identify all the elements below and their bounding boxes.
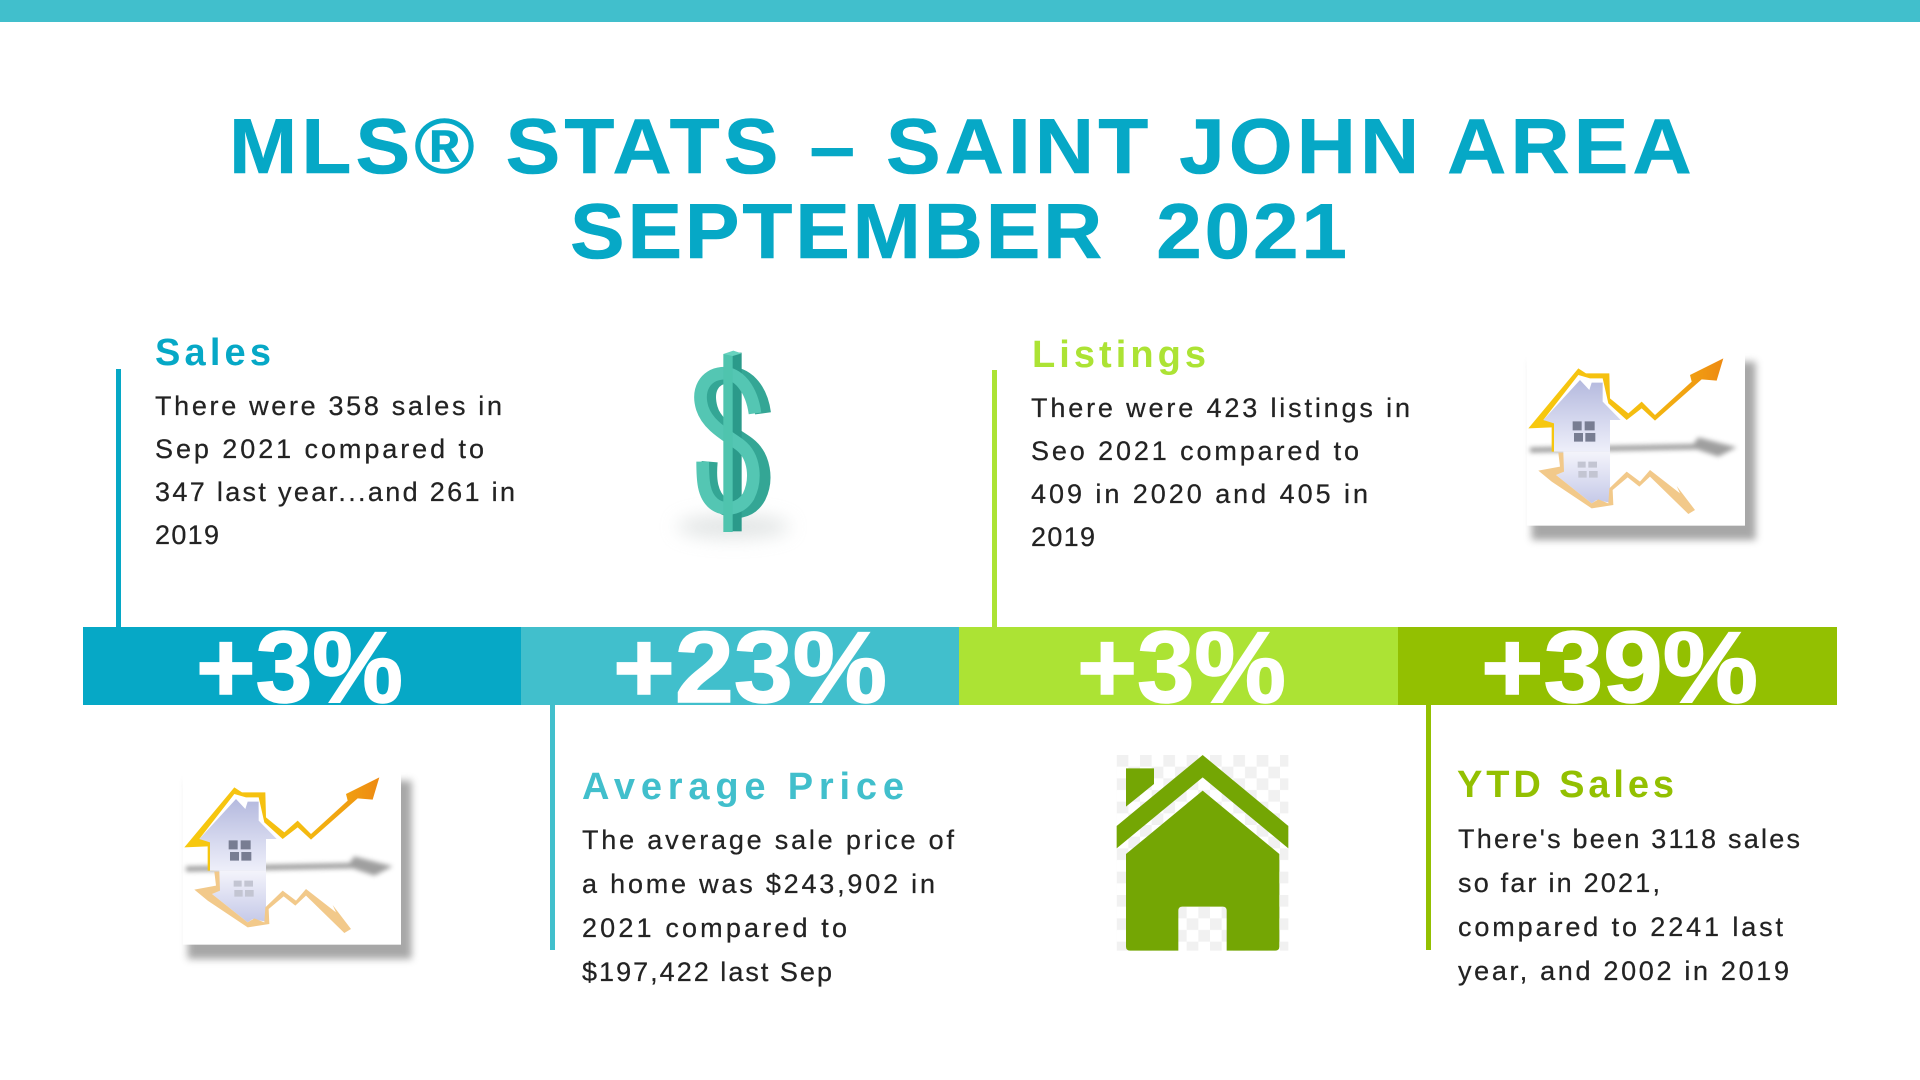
stat: +3% listings: +3% bbox=[1077, 612, 1286, 724]
sales text: 2019 bbox=[155, 520, 219, 550]
panel: sales bbox=[116, 332, 515, 627]
average price text: a home was $243,902 in bbox=[582, 869, 935, 899]
average price rule bbox=[550, 705, 555, 950]
ytd sales heading: YTD Sales bbox=[1457, 764, 1674, 806]
average price text: 2021 compared to bbox=[582, 913, 847, 943]
ytd sales text bbox=[1458, 824, 1800, 986]
icon: green house bbox=[1117, 755, 1288, 951]
ytd sales text: compared to 2241 last bbox=[1458, 912, 1783, 942]
sales text: Sep 2021 compared to bbox=[155, 434, 484, 464]
listings text: There were 423 listings in bbox=[1031, 393, 1410, 423]
sales text: There were 358 sales in bbox=[155, 391, 502, 421]
ytd sales text: so far in 2021, bbox=[1458, 868, 1660, 898]
panel: ytd sales bbox=[1426, 705, 1800, 986]
sales rule bbox=[116, 369, 121, 627]
listings text: 2019 bbox=[1031, 522, 1095, 552]
title line 1: MLS® STATS – SAINT JOHN AREA bbox=[229, 103, 1692, 190]
segment: sales bbox=[83, 627, 521, 705]
listings text: 409 in 2020 and 405 in bbox=[1031, 479, 1368, 509]
segment: listings bbox=[959, 627, 1398, 705]
ytd sales rule bbox=[1426, 705, 1431, 950]
average price text: The average sale price of bbox=[582, 825, 954, 855]
percentage bar bbox=[83, 612, 1837, 724]
top bar bbox=[0, 0, 1920, 22]
sales heading: Sales bbox=[155, 332, 271, 374]
segment: ytd sales bbox=[1398, 627, 1837, 705]
average price heading: Average Price bbox=[582, 766, 904, 808]
sales text: 347 last year...and 261 in bbox=[155, 477, 515, 507]
ytd sales text: year, and 2002 in 2019 bbox=[1458, 956, 1789, 986]
average price text: $197,422 last Sep bbox=[582, 957, 832, 987]
listings text: Seo 2021 compared to bbox=[1031, 436, 1359, 466]
listings text bbox=[1031, 393, 1410, 552]
stat: +3% sales: +3% bbox=[196, 612, 403, 724]
listings heading: Listings bbox=[1032, 334, 1206, 376]
sales text bbox=[155, 391, 515, 550]
ytd sales text: There's been 3118 sales bbox=[1458, 824, 1800, 854]
title line 2: SEPTEMBER 2021 bbox=[570, 188, 1347, 275]
stat: +39% ytd: +39% bbox=[1481, 612, 1758, 724]
panel: average price bbox=[550, 705, 954, 987]
average price text bbox=[582, 825, 954, 987]
segment: average price bbox=[521, 627, 959, 705]
listings rule bbox=[992, 370, 997, 627]
icon: house with rising arrow (listings) bbox=[1527, 340, 1756, 540]
title bbox=[229, 103, 1692, 275]
panel: listings bbox=[992, 334, 1410, 627]
stat: +23% price: +23% bbox=[613, 612, 887, 724]
icon: house with rising arrow (bottom left) bbox=[183, 759, 412, 959]
icon: dollar sign bbox=[677, 351, 790, 538]
